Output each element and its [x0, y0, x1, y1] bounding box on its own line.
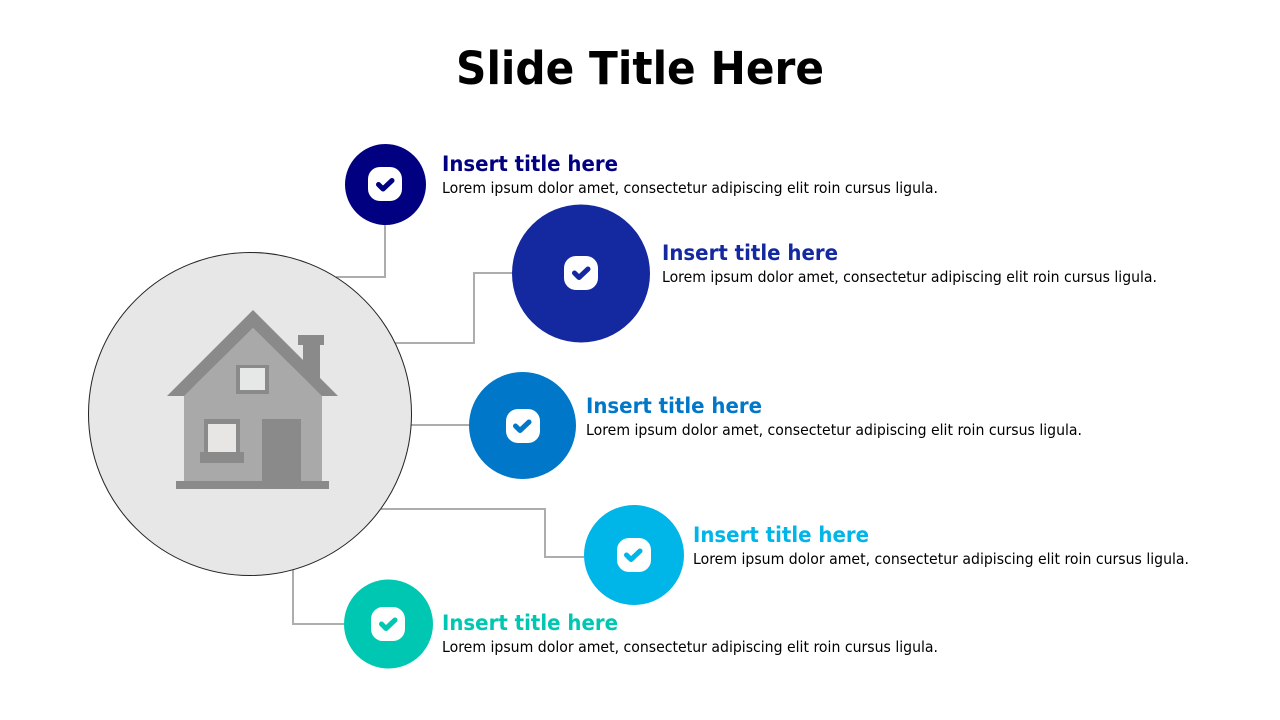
heading 2: Insert title here [662, 241, 838, 265]
icon: check badge 4 [584, 505, 684, 605]
item 2 [512, 204, 1157, 342]
body 1: Lorem ipsum dolor amet, consectetur adipiscing elit roin cursus ligula. [442, 179, 938, 197]
central circle [88, 252, 412, 576]
body 4: Lorem ipsum dolor amet, consectetur adipiscing elit roin cursus ligula. [693, 550, 1189, 568]
item 5 [344, 580, 938, 668]
body 5: Lorem ipsum dolor amet, consectetur adipiscing elit roin cursus ligula. [442, 638, 938, 656]
body 2: Lorem ipsum dolor amet, consectetur adipiscing elit roin cursus ligula. [662, 268, 1157, 286]
heading 5: Insert title here [442, 611, 618, 635]
connector lines [293, 224, 584, 624]
item 1 [345, 144, 938, 225]
title: Slide Title Here [456, 42, 824, 95]
icon: check badge 3 [469, 372, 576, 479]
heading 1: Insert title here [442, 152, 618, 176]
item 4 [584, 505, 1189, 605]
icon: check badge 1 [345, 144, 426, 225]
heading 4: Insert title here [693, 523, 869, 547]
body 3: Lorem ipsum dolor amet, consectetur adipiscing elit roin cursus ligula. [586, 421, 1082, 439]
item 3 [469, 372, 1082, 479]
icon: house [167, 310, 338, 489]
icon: check badge 2 [512, 204, 650, 342]
icon: check badge 5 [344, 580, 433, 668]
heading 3: Insert title here [586, 394, 762, 418]
